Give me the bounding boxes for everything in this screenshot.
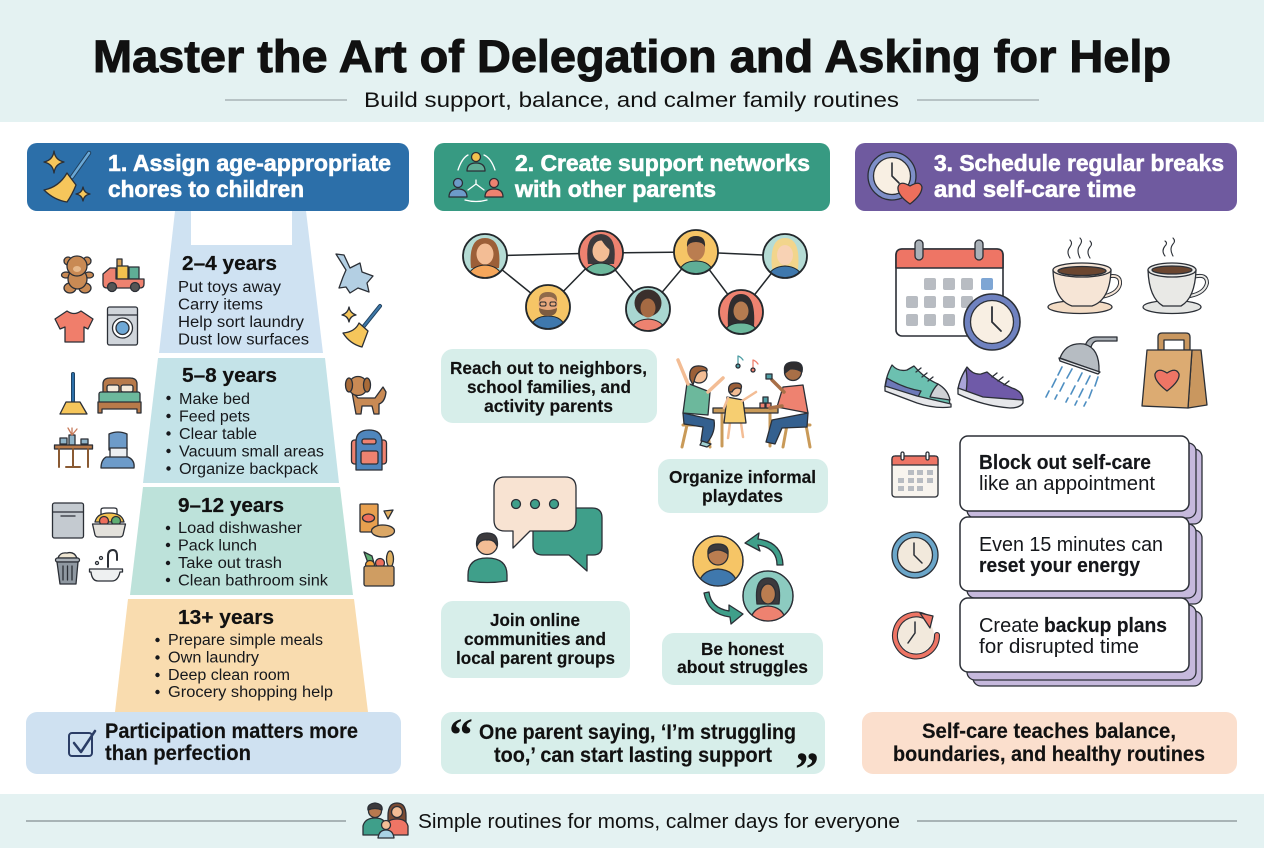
illustration: two parents exchanging [693,533,793,624]
icon: family [363,803,408,838]
tier: 2-4 years: Put toys away [178,279,281,296]
text box: playdates [658,459,828,513]
subtitle: Build support, balance, and calmer family routines [364,89,899,112]
avatar: parent 1 [463,234,507,280]
tier: 9-12 years: Pack lunch [178,538,257,554]
header band [0,0,1264,122]
icon: clock with heart [868,152,922,204]
section header 1 [27,143,409,211]
section header 2 [434,143,830,211]
text box: reach out: Reach out to neighbors, [450,358,647,378]
icon: small calendar [892,452,938,497]
panel: support networks column [434,143,830,796]
icon: dining table [54,428,92,467]
footer text: Simple routines for moms, calmer days for everyone [418,811,900,833]
footer band [0,794,1264,848]
illustration: shower head [1046,337,1117,406]
illustration: chat bubbles [468,477,602,582]
section header 1: chores to children [108,176,304,202]
card stack: 15 minutes: reset your energy [979,555,1141,577]
avatar: parent 2 [526,285,570,331]
card stack: block out self-care: Block out self-care [979,452,1151,474]
callout: quote [441,709,825,796]
avatar: parent 3 [579,231,623,277]
icon: toy truck [103,259,144,292]
text box: join communities [441,601,630,678]
card stack: backup plans: Create [979,615,1039,637]
callout: self-care teaches: boundaries, and healthy routines [893,743,1205,766]
text box: be honest: Be honest [701,639,784,659]
avatar: parent 6 [719,290,763,336]
tier: 13+ years: Deep clean room [168,667,290,684]
tier: 5-8 years: Make bed [179,391,250,408]
avatar: parent 5 [674,230,718,276]
callout: participation: than perfection [105,742,251,765]
tier: 9-12 years: Take out trash [178,555,282,572]
text box: reach out [441,349,657,423]
tier: 5-8 years: Clear table [179,426,257,443]
tier: 2-4 years: Carry items [178,296,263,314]
tier: 2-4 years: 2–4 years [182,253,277,275]
text box: join communities: communities and [464,629,606,649]
icon: lunch box [92,508,126,537]
illustration: family at table [678,356,810,447]
text box: playdates: playdates [702,486,783,506]
tier: 13+ years: Own laundry [168,650,259,666]
text box: playdates: Organize informal [669,467,816,487]
icon: dog [346,376,386,414]
tier: 5-8 years: Feed pets [179,408,250,426]
icon: duster [336,254,373,293]
icon: refresh clock [895,613,937,656]
text box: reach out: activity parents [484,396,613,416]
text box: reach out: school families, and [467,377,631,397]
tier: 9-12 years: Load dishwasher [178,520,302,537]
card stack: backup plans: backup plans [1044,615,1167,637]
callout: quote: “ [449,709,473,762]
tier: 5-8 years: Vacuum small areas [179,444,324,460]
text box: join communities: local parent groups [456,648,615,668]
illustration: gift bag with heart [1142,333,1207,408]
icon: snack bag and bread [360,504,394,537]
tier: 13+ years: Prepare simple meals [168,632,323,649]
tier: 2-4 years: Dust low surfaces [178,332,309,348]
section header 3: 3. Schedule regular breaks [934,150,1224,176]
tier: 5-8 years: 5–8 years [182,365,277,387]
icon: washing machine [108,307,138,345]
icon: dishwasher [52,503,84,538]
tier: 9-12 years [130,487,353,595]
section header 1: 1. Assign age-appropriate [108,150,391,176]
callout: participation [26,712,401,774]
icon: grocery bag [364,551,394,586]
section header 3: and self-care time [934,176,1136,202]
icon: broom and sparkles [44,151,90,202]
icon: blue clock [892,532,938,578]
network of parents [463,230,807,336]
icon: vacuum [101,432,134,468]
card stack: block out self-care: like an appointment [979,473,1155,495]
panel: chores column [26,143,409,774]
section header 2: with other parents [514,176,716,202]
icon: checkbox [69,731,95,756]
callout: quote: ” [795,743,819,796]
title: Master the Art of Delegation and Asking for Help [93,31,1171,82]
icon: teddy bear [62,256,94,293]
section header 3 [855,143,1237,211]
text box: be honest: about struggles [677,657,808,677]
card stack: block out self-care [960,436,1202,524]
icon: people network [449,152,503,202]
icon: bathroom sink [90,550,122,581]
card stack: 15 minutes [960,517,1202,604]
icon: push broom [60,374,87,414]
avatar: parent 4 [626,287,670,333]
illustration: calendar with clock [896,240,1020,350]
avatar: parent 7 [763,234,807,280]
tier: 2-4 years [159,211,323,353]
callout: self-care teaches [862,712,1237,774]
tier: 9-12 years: 9–12 years [178,495,284,517]
text box: be honest [662,633,823,685]
icon: bed [98,378,141,413]
card stack: 15 minutes: Even 15 minutes can [979,534,1163,556]
icon: small broom [342,306,380,347]
card stack: backup plans [960,598,1202,686]
text box: join communities: Join online [490,610,580,630]
icon: t-shirt [55,311,93,342]
tier: 5-8 years: Organize backpack [179,461,318,478]
section header 2: 2. Create support networks [515,150,810,176]
icon: trash bin [56,553,80,584]
tier: 13+ years: 13+ years [178,607,274,629]
panel: self-care column [855,143,1237,774]
tier: 13+ years [115,599,368,712]
callout: quote: too,’ can start lasting support [494,744,772,767]
card stack: backup plans: for disrupted time [979,636,1139,658]
callout: participation: Participation matters more [105,720,358,743]
illustration: coffee cup [1048,238,1120,314]
tier: 13+ years: Grocery shopping help [168,684,333,701]
icon: backpack [352,430,386,470]
tier: 2-4 years: Help sort laundry [178,314,304,331]
tier: 5-8 years [143,358,339,483]
illustration: shoes [885,365,1023,408]
illustration: mug with saucer [1143,238,1207,314]
callout: quote: One parent saying, ‘I’m struggling [479,721,796,744]
callout: self-care teaches: Self-care teaches balance, [922,720,1176,743]
tier: 9-12 years: Clean bathroom sink [178,572,328,590]
